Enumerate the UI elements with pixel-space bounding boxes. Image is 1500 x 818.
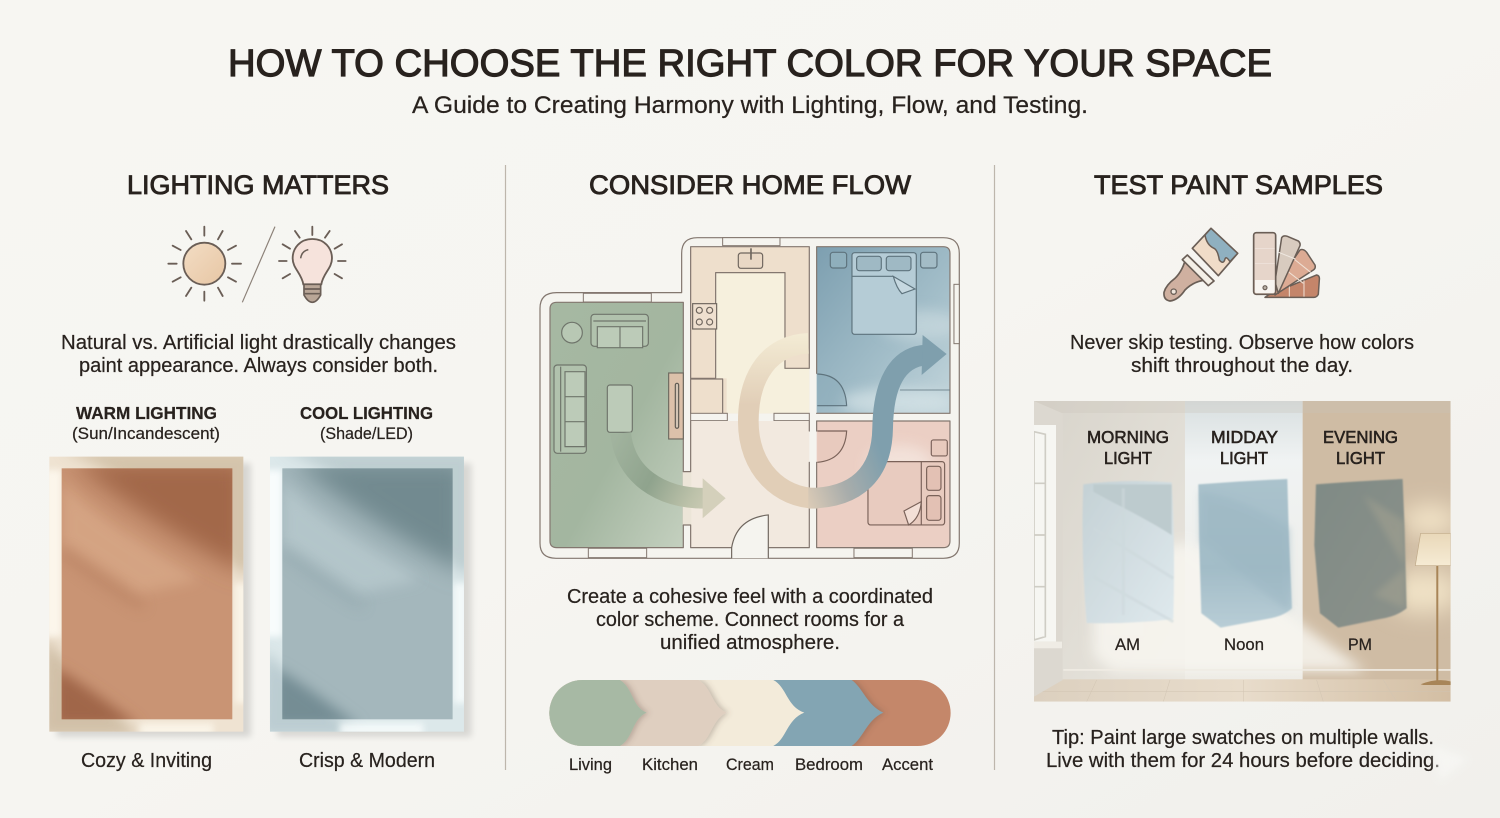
wall: evening <box>1303 401 1451 702</box>
scene labels: EVENING <box>1323 427 1398 447</box>
lighting description <box>61 332 456 377</box>
tip <box>1046 727 1440 772</box>
panel: lighting matters <box>40 170 473 772</box>
swatch: warm terracotta paper <box>40 450 253 737</box>
lighting description: paint appearance. Always consider both. <box>79 355 438 377</box>
flow description: unified atmosphere. <box>660 632 840 654</box>
tip: Tip: Paint large swatches on multiple walls. <box>1052 727 1434 749</box>
panel: consider home flow <box>540 170 960 774</box>
heading: test paint samples: TEST PAINT SAMPLES <box>1094 170 1383 200</box>
palette labels: Living <box>569 756 612 774</box>
palette labels: Bedroom <box>795 756 863 774</box>
scene labels: AM <box>1115 636 1140 654</box>
caption: cozy and inviting: Cozy & Inviting <box>81 750 212 772</box>
palette labels: Accent <box>882 756 933 774</box>
testing description: Never skip testing. Observe how colors <box>1070 332 1414 354</box>
floor <box>1034 679 1451 702</box>
label: cool lighting: COOL LIGHTING <box>300 403 433 423</box>
segment: kitchen <box>620 680 729 746</box>
palette ribbon <box>548 680 951 746</box>
subtitle: A Guide to Creating Harmony with Lighting, Flow, and Testing. <box>412 92 1088 119</box>
panel: test paint samples <box>1034 170 1460 772</box>
label: cool lighting: (Shade/LED) <box>320 425 413 443</box>
outer wall <box>540 238 959 558</box>
wall: morning <box>1034 401 1185 702</box>
room: second bedroom <box>817 421 950 558</box>
room: kitchen <box>691 238 809 421</box>
scene labels <box>1087 427 1398 654</box>
segment: living <box>548 680 647 746</box>
segment: cream <box>548 680 804 746</box>
heading: consider home flow: CONSIDER HOME FLOW <box>589 170 911 200</box>
label: warm lighting <box>72 403 220 443</box>
floor plan <box>540 238 960 558</box>
scene labels: LIGHT <box>1220 448 1268 468</box>
arrow: living to hallway <box>621 433 726 518</box>
swatch: morning <box>1083 481 1174 623</box>
scene labels: MIDDAY <box>1211 427 1278 447</box>
caption: crisp and modern: Crisp & Modern <box>299 750 435 772</box>
segment: bedroom <box>548 680 883 746</box>
icon: sun and light bulb <box>168 227 346 302</box>
arrow: kitchen to bedroom <box>748 335 947 498</box>
flow description: color scheme. Connect rooms for a <box>596 609 905 631</box>
label: warm lighting: WARM LIGHTING <box>76 403 217 423</box>
palette labels <box>569 756 933 774</box>
flow description: Create a cohesive feel with a coordinated <box>567 586 933 608</box>
testing description: shift throughout the day. <box>1131 355 1353 377</box>
scene labels: PM <box>1348 636 1372 654</box>
scene labels: LIGHT <box>1104 448 1152 468</box>
palette labels: Cream <box>726 756 774 774</box>
testing description <box>1070 332 1414 377</box>
room: hallway <box>683 421 809 558</box>
title: HOW TO CHOOSE THE RIGHT COLOR FOR YOUR SPACE <box>228 43 1272 85</box>
lamp glow <box>1402 505 1458 535</box>
palette labels: Kitchen <box>642 756 698 774</box>
scene labels: MORNING <box>1087 427 1169 447</box>
scene labels: Noon <box>1224 636 1264 654</box>
flow description <box>567 586 933 654</box>
floor lamp <box>1415 533 1452 685</box>
wall: midday <box>1185 401 1303 702</box>
label: cool lighting <box>300 403 433 443</box>
swatch: evening <box>1314 479 1407 628</box>
label: warm lighting: (Sun/Incandescent) <box>72 425 220 443</box>
window <box>1034 401 1063 697</box>
swatch: midday <box>1198 479 1292 628</box>
scene labels: LIGHT <box>1336 448 1385 468</box>
icon: paint brush and fan deck <box>1164 228 1319 301</box>
room: living <box>550 293 683 558</box>
tip: Live with them for 24 hours before deciding. <box>1046 750 1440 772</box>
sun beam <box>1093 542 1367 672</box>
lighting description: Natural vs. Artificial light drastically changes <box>61 332 456 354</box>
swatch: cool blue paper <box>260 450 473 737</box>
room: main bedroom <box>817 247 960 415</box>
room scene: morning midday evening <box>1034 401 1460 702</box>
heading: lighting matters: LIGHTING MATTERS <box>127 170 389 200</box>
